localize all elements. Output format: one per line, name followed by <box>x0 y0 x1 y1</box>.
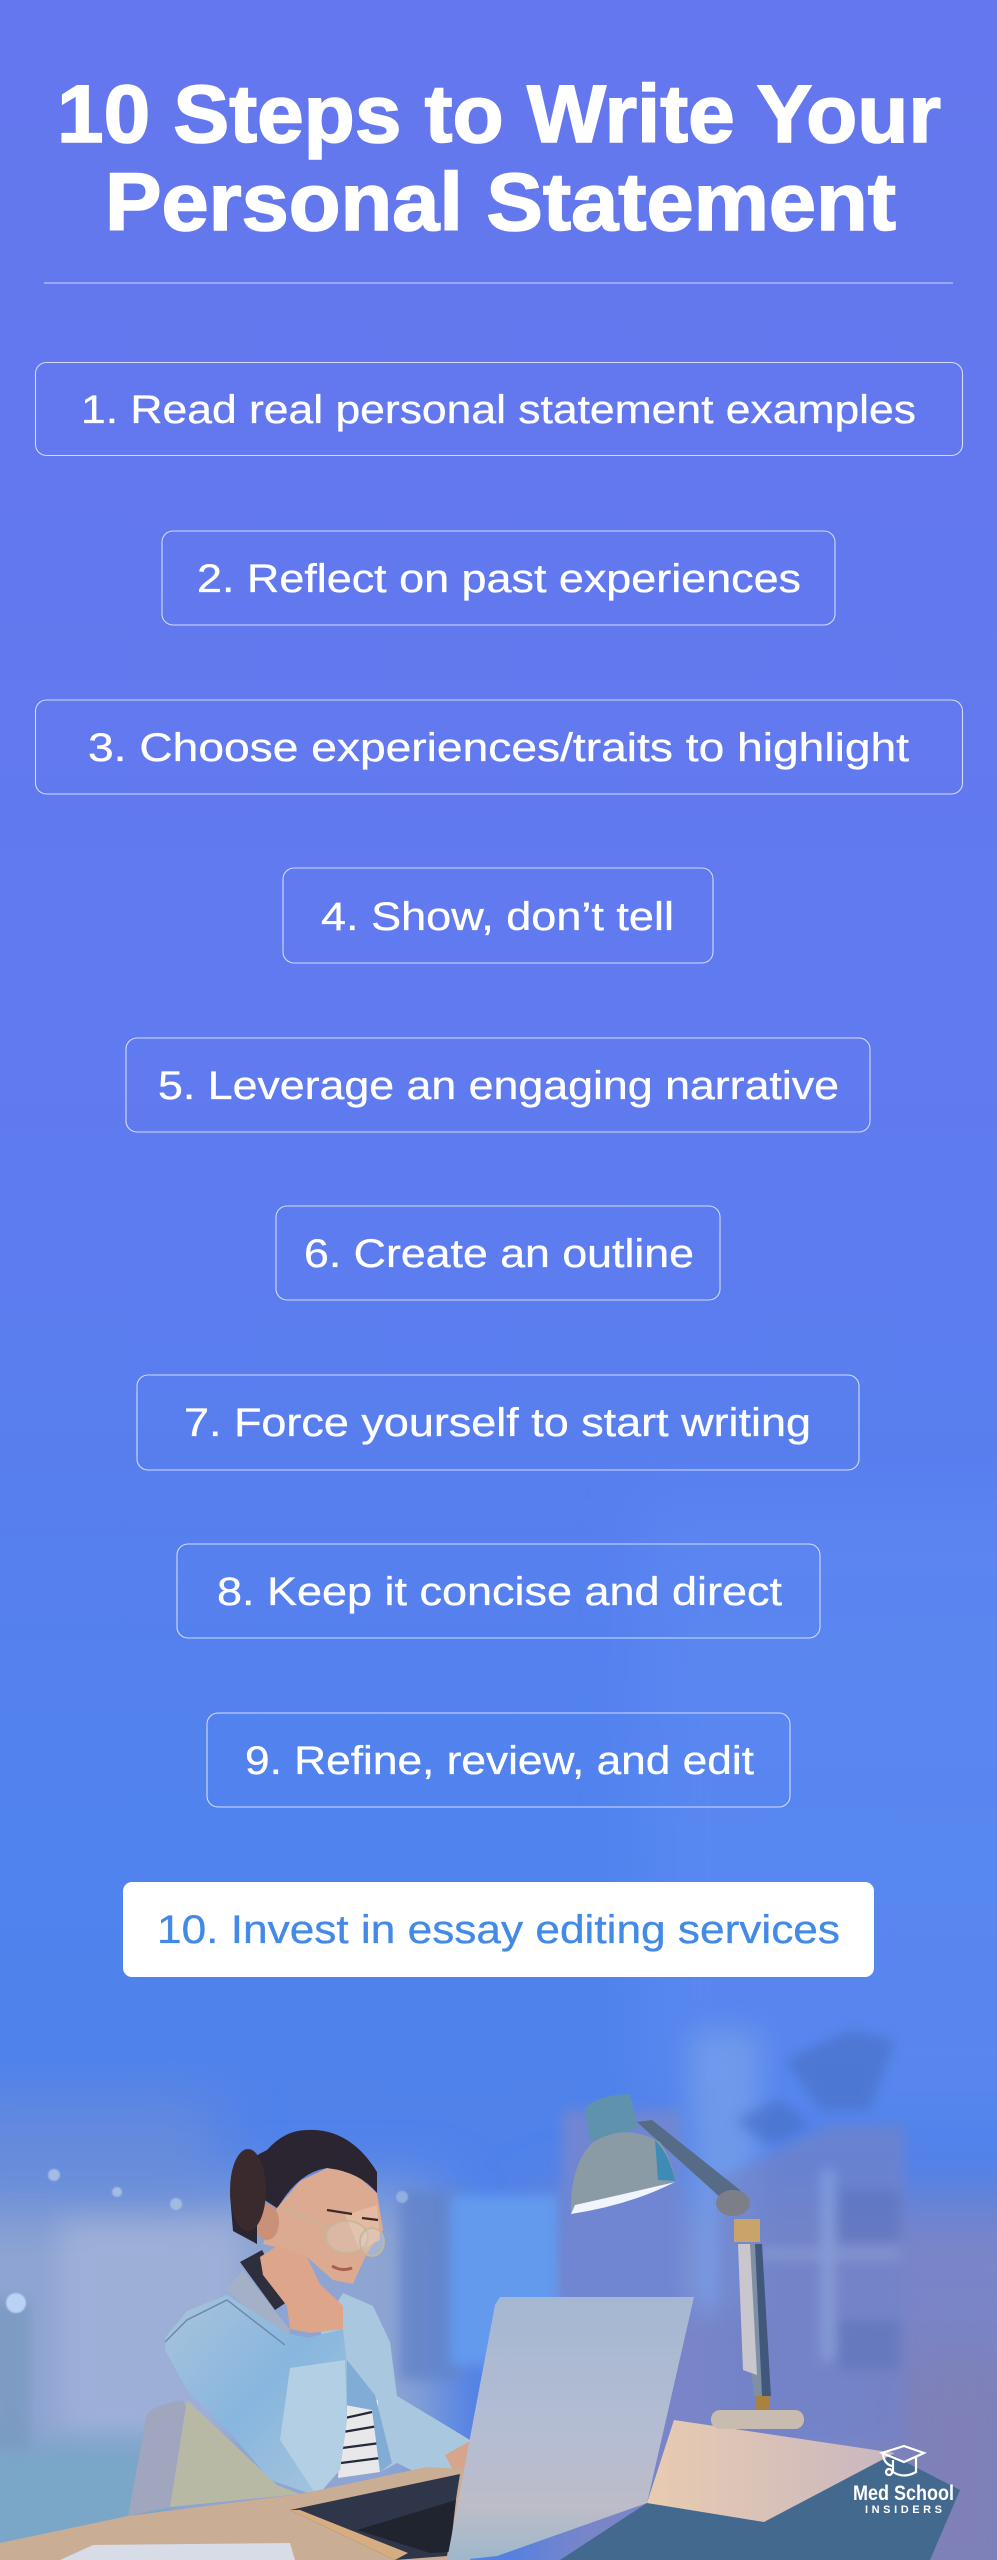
step 6 <box>276 1206 720 1300</box>
paper on desk <box>60 2543 295 2560</box>
bookshelf and plant <box>718 2030 905 2440</box>
step 3 <box>36 700 962 794</box>
keyboard <box>290 2474 460 2560</box>
desk left <box>0 2467 480 2560</box>
logo: Med School Insiders: Med School <box>853 2482 954 2505</box>
step 6: 6. Create an outline <box>304 1232 694 1276</box>
collar <box>227 2270 290 2345</box>
logo: Med School Insiders: INSIDERS <box>865 2504 942 2516</box>
step 8: 8. Keep it concise and direct <box>217 1570 782 1614</box>
chair <box>128 2400 197 2516</box>
bokeh lights <box>6 2169 408 2313</box>
step 2: 2. Reflect on past experiences <box>197 557 801 601</box>
glasses <box>285 2208 384 2256</box>
title: 10 Steps to Write Your <box>57 69 941 160</box>
striped shirt <box>338 2400 380 2478</box>
step 5 <box>126 1038 870 1132</box>
hair <box>230 2130 377 2244</box>
step 7 <box>137 1375 859 1470</box>
woman <box>165 2130 472 2507</box>
icon: graduation cap with stethoscope <box>882 2446 924 2476</box>
desk lamp <box>571 2094 804 2429</box>
title <box>57 69 941 248</box>
hand <box>260 2246 343 2333</box>
sleeve <box>165 2295 347 2496</box>
dark shirt collar <box>240 2250 290 2310</box>
step 9: 9. Refine, review, and edit <box>245 1739 754 1783</box>
step 4: 4. Show, don’t tell <box>321 895 674 939</box>
desk right <box>560 2420 960 2560</box>
step 5: 5. Leverage an engaging narrative <box>158 1064 839 1108</box>
step 10 highlighted <box>123 1882 874 1977</box>
step 8 <box>177 1544 820 1638</box>
title: Personal Statement <box>105 157 896 248</box>
step 1 <box>36 362 962 456</box>
logo: Med School Insiders <box>853 2446 954 2516</box>
step 10 highlighted: 10. Invest in essay editing services <box>157 1908 840 1952</box>
step 2 <box>162 531 835 625</box>
jacket body right <box>320 2293 470 2477</box>
step 1: 1. Read real personal statement examples <box>81 388 916 432</box>
step 3: 3. Choose experiences/traits to highlight <box>88 726 909 770</box>
laptop lid <box>447 2297 694 2560</box>
step 9 <box>207 1713 790 1807</box>
illustration: woman at desk with laptop and lamp <box>0 2030 997 2560</box>
blurred room background <box>0 2030 997 2560</box>
face <box>263 2168 383 2284</box>
lower torso <box>170 2400 300 2507</box>
panel: steps list <box>36 362 962 1977</box>
hair bun <box>230 2149 266 2231</box>
step 4 <box>283 868 713 963</box>
step 7: 7. Force yourself to start writing <box>184 1401 811 1445</box>
